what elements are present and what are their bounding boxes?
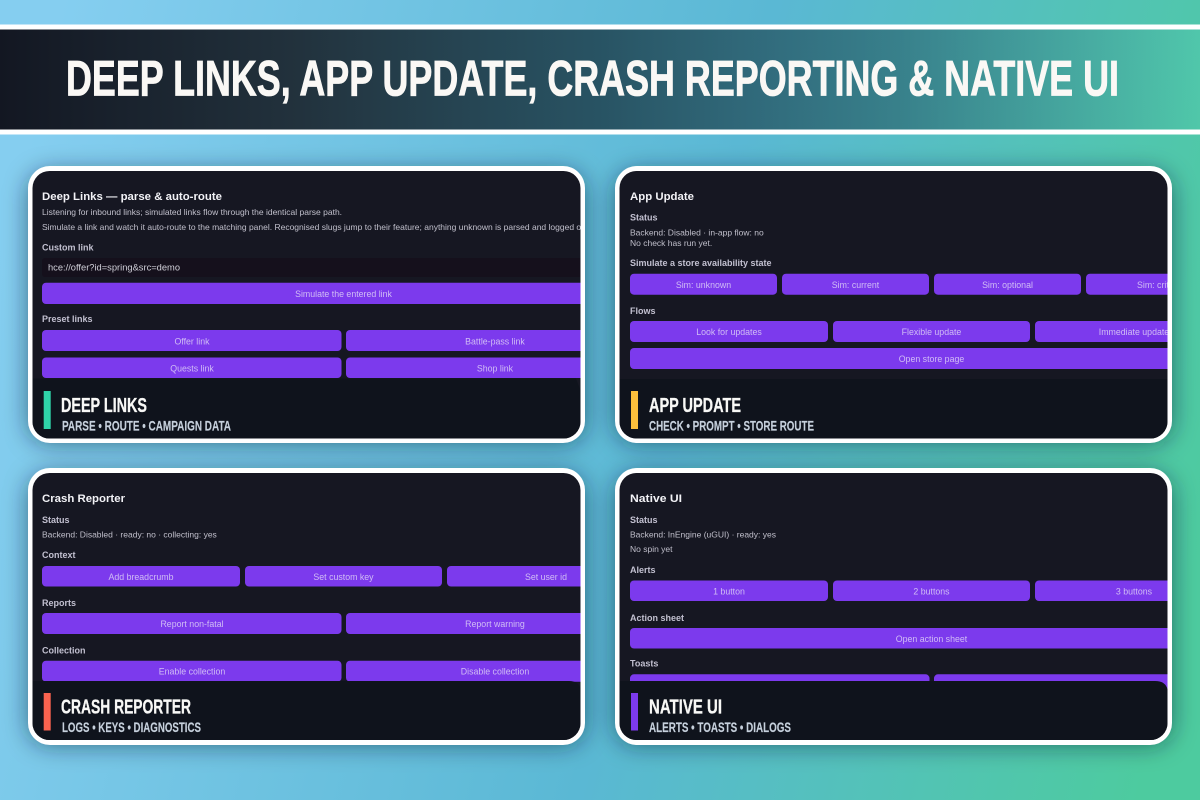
button: shop link [346, 358, 580, 378]
button: battle-pass link [346, 330, 580, 351]
caption title: NATIVE UI [649, 696, 722, 718]
button: battle-pass link: Battle-pass link [465, 336, 525, 346]
button: disable collection [346, 661, 645, 682]
button: 3 buttons [1035, 580, 1200, 601]
status line 1: Backend: InEngine (uGUI) · ready: yes [630, 530, 776, 540]
caption band: native ui [619, 681, 1168, 741]
button: sim optional: Sim: optional [982, 280, 1033, 290]
button: 2 buttons: 2 buttons [913, 586, 950, 596]
caption band: crash reporter [32, 681, 581, 741]
label: preset links: Preset links [42, 314, 93, 324]
button: look for updates [630, 321, 828, 342]
button: sim unknown: Sim: unknown [676, 280, 731, 290]
status line 1: Backend: Disabled · in-app flow: no [630, 228, 764, 238]
button: sim current [782, 274, 929, 295]
button: offer link [42, 330, 342, 351]
button: quests link [42, 358, 342, 378]
button: sim optional [934, 274, 1081, 295]
button: toast left [630, 674, 930, 695]
button: report warning: Report warning [465, 619, 525, 629]
button: 2 buttons [833, 580, 1030, 601]
caption subtitle: ALERTS • TOASTS • DIALOGS [649, 720, 791, 735]
button: flexible update: Flexible update [902, 327, 961, 337]
button: sim current: Sim: current [832, 280, 880, 290]
button: simulate [42, 283, 645, 304]
button: open store page: Open store page [899, 354, 964, 364]
button: set user id: Set user id [525, 572, 567, 582]
button: report non-fatal [42, 613, 342, 634]
description line 2: Simulate a link and watch it auto-route to the matching panel. Recognised slugs jump to their feature; anything unknown is parsed and logged only. [42, 222, 594, 232]
heading: deep links panel: Deep Links — parse & auto-route [42, 191, 222, 203]
panel: app update [615, 166, 1200, 443]
button: report warning [346, 613, 645, 634]
button: add breadcrumb: Add breadcrumb [108, 572, 174, 582]
description line 1: Listening for inbound links; simulated links flow through the identical parse path. [42, 207, 342, 217]
caption subtitle: PARSE • ROUTE • CAMPAIGN DATA [62, 418, 231, 434]
button: look for updates: Look for updates [696, 327, 762, 337]
button: sim unknown [630, 274, 777, 295]
caption band: deep links [32, 422, 580, 438]
status line 2: No spin yet [630, 544, 673, 554]
label: status: Status [630, 515, 658, 525]
heading: app update panel: App Update [630, 191, 694, 203]
button: 3 buttons: 3 buttons [1116, 586, 1153, 596]
input: custom link: hce://offer?id=spring&src=demo [48, 262, 180, 274]
button: offer link: Offer link [174, 336, 210, 346]
label: simulate store state: Simulate a store availability state [630, 258, 772, 268]
accent bar: green [44, 391, 51, 429]
label: collection: Collection [42, 646, 86, 656]
caption title: CRASH REPORTER [61, 696, 191, 718]
label: action sheet: Action sheet [630, 613, 684, 623]
label: alerts: Alerts [630, 565, 656, 575]
button: immediate update: Immediate update [1099, 327, 1169, 337]
panel: deep links [28, 166, 645, 443]
caption title: APP UPDATE [649, 395, 741, 417]
panel: crash reporter [28, 468, 645, 745]
button: sim critical: Sim: critical [1137, 280, 1182, 290]
label: status: Status [42, 515, 70, 525]
caption subtitle: LOGS • KEYS • DIAGNOSTICS [62, 720, 201, 735]
button: sim critical [1086, 274, 1168, 295]
heading: crash reporter panel: Crash Reporter [42, 493, 126, 505]
caption subtitle: CHECK • PROMPT • STORE ROUTE [649, 418, 814, 434]
accent bar: red [44, 693, 51, 730]
label: context: Context [42, 550, 76, 560]
button: report non-fatal: Report non-fatal [160, 619, 224, 629]
button: shop link: Shop link [477, 364, 514, 374]
label: custom link: Custom link [42, 242, 94, 252]
label: flows: Flows [630, 306, 656, 316]
button: open action sheet [630, 628, 1200, 648]
button: add breadcrumb [42, 566, 240, 586]
button: flexible update [833, 321, 1030, 342]
label: reports: Reports [42, 598, 76, 608]
button: toast right [934, 674, 1200, 695]
button: simulate: Simulate the entered link [295, 289, 393, 299]
caption title: DEEP LINKS [61, 395, 147, 417]
accent bar: violet [631, 693, 638, 730]
label: status: Status [630, 212, 658, 222]
button: disable collection: Disable collection [461, 666, 529, 676]
caption band: app update [620, 422, 1168, 438]
panel: native ui [615, 468, 1200, 745]
button: set custom key [245, 566, 442, 586]
heading: native ui panel: Native UI [630, 493, 682, 505]
status line: Backend: Disabled · ready: no · collecting: yes [42, 530, 217, 540]
accent bar: amber [631, 391, 638, 429]
button: open store page [630, 348, 1200, 369]
button: open action sheet: Open action sheet [896, 634, 968, 644]
button: 1 button: 1 button [713, 586, 745, 596]
button: enable collection [42, 661, 342, 682]
status line 2: No check has run yet. [630, 238, 712, 248]
button: set custom key: Set custom key [313, 572, 374, 582]
button: set user id [447, 566, 645, 586]
button: immediate update [1035, 321, 1168, 342]
button: enable collection: Enable collection [159, 666, 225, 676]
header banner [0, 24, 1200, 134]
button: 1 button [630, 580, 828, 601]
button: quests link: Quests link [170, 364, 214, 374]
label: toasts: Toasts [630, 658, 658, 668]
